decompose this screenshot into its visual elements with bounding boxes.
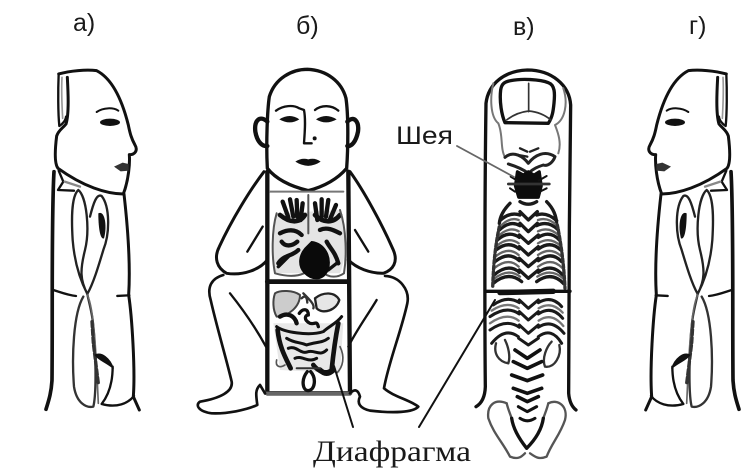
figure а: finger-shaped body in left profile	[46, 70, 139, 410]
neck vertebrae	[515, 172, 541, 197]
back and neck	[46, 172, 54, 409]
finger outline	[476, 70, 576, 410]
lumbar vertebrae	[512, 350, 543, 402]
upper arm loops	[72, 190, 87, 294]
hand and foot	[95, 354, 113, 368]
label: г): г)	[689, 12, 706, 40]
figure б: seated body, front view with organs	[198, 69, 418, 413]
rib cage upper	[493, 202, 564, 284]
jaw	[505, 154, 555, 173]
lung shading	[273, 210, 345, 273]
diaphragm line	[485, 286, 570, 296]
intestines	[277, 317, 342, 334]
figure в: finger outline with skeleton	[476, 70, 576, 458]
left arm	[216, 172, 267, 274]
heart	[300, 242, 329, 279]
torso frame	[267, 172, 350, 393]
eyebrows and nose	[276, 106, 312, 143]
lower leg loops	[73, 294, 96, 407]
head	[267, 69, 348, 191]
pelvis	[488, 402, 566, 458]
lower rib shading	[490, 305, 563, 326]
abdomen shading	[273, 323, 343, 373]
skull box	[500, 79, 554, 123]
label: б): б)	[296, 12, 319, 40]
pointer line: diaphragm on figure б	[334, 366, 353, 427]
figure г: mirrored finger-shaped body in right profile	[646, 70, 739, 410]
eyebrow	[97, 108, 118, 112]
eye	[100, 119, 120, 126]
right leg	[350, 276, 418, 412]
label: а): а)	[73, 9, 95, 37]
pelvic organ	[303, 372, 314, 391]
label: Шея: Шея	[396, 122, 453, 150]
lower ribs	[490, 299, 564, 345]
ribs shading	[493, 225, 565, 288]
liver and stomach	[273, 291, 300, 317]
mouth	[114, 163, 129, 171]
intermediate rib shading	[493, 219, 564, 279]
right arm	[348, 172, 395, 273]
front of body	[124, 194, 139, 410]
eyes	[279, 116, 299, 122]
head in profile	[55, 70, 136, 194]
mouth	[295, 159, 321, 166]
pointer line: neck	[457, 146, 514, 177]
lungs	[283, 199, 336, 220]
left leg	[198, 275, 265, 413]
diaphragm ticks	[53, 290, 129, 296]
pointer line: diaphragm on figure в	[419, 300, 495, 427]
label: в): в)	[513, 13, 535, 41]
floating rib loops	[495, 340, 509, 363]
ears	[255, 119, 267, 146]
label: Диафрагма: Диафрагма	[313, 435, 471, 468]
